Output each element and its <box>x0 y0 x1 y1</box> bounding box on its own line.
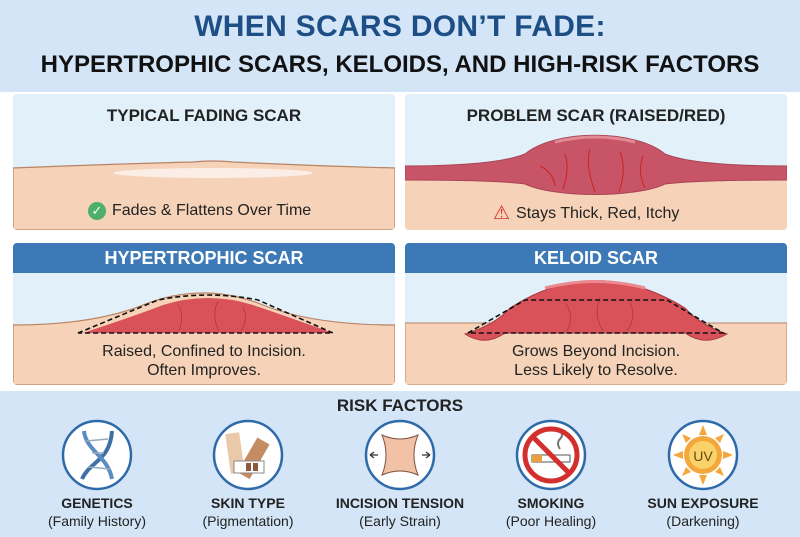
heading: RISK FACTORS <box>337 396 463 415</box>
label: incision tension: INCISION TENSION <box>336 495 464 511</box>
caption with warning icon: Stays Thick, Red, Itchy <box>516 204 679 222</box>
caption: Often Improves. <box>147 362 261 379</box>
caption: Less Likely to Resolve. <box>514 362 678 379</box>
icon: tension <box>370 435 430 475</box>
panel: problem scar <box>405 94 787 230</box>
panel: hypertrophic scar <box>13 243 395 385</box>
label: skin type: SKIN TYPE <box>211 495 285 511</box>
icon: dna <box>82 431 112 479</box>
label: genetics: (Family History) <box>48 513 146 529</box>
header bar: KELOID SCAR <box>534 248 658 268</box>
caption <box>102 343 306 379</box>
icon: sun uv <box>673 425 733 485</box>
label: smoking <box>506 495 596 529</box>
caption <box>512 343 680 379</box>
subtitle: HYPERTROPHIC SCARS, KELOIDS, AND HIGH-RISK FACTORS <box>41 51 759 78</box>
label: sun exposure <box>647 495 759 529</box>
label: sun exposure: SUN EXPOSURE <box>647 495 759 511</box>
label: skin type <box>202 495 294 529</box>
label: incision tension <box>336 495 464 529</box>
icon: no smoking <box>525 429 577 481</box>
panel: risk factors <box>0 391 800 537</box>
caption with check icon: ✓ <box>92 203 102 218</box>
label: incision tension: (Early Strain) <box>359 513 441 529</box>
caption: Grows Beyond Incision. <box>512 343 680 360</box>
icon: sun uv: UV <box>693 448 713 464</box>
label: genetics: GENETICS <box>61 495 133 511</box>
caption: Raised, Confined to Incision. <box>102 343 306 360</box>
icon: skin swatches <box>225 432 270 479</box>
label: skin type: (Pigmentation) <box>202 513 294 529</box>
panel: keloid scar <box>405 243 787 385</box>
label: sun exposure: (Darkening) <box>666 513 740 529</box>
header bar: HYPERTROPHIC SCAR <box>104 248 304 268</box>
title: WHEN SCARS DON’T FADE: <box>194 10 606 43</box>
header band <box>0 0 800 92</box>
panel: typical fading scar <box>13 94 395 230</box>
header bar <box>13 243 395 273</box>
heading: PROBLEM SCAR (RAISED/RED) <box>467 106 725 125</box>
caption with warning icon: ⚠ <box>493 203 510 224</box>
label: smoking: SMOKING <box>518 495 584 511</box>
heading: TYPICAL FADING SCAR <box>107 106 301 125</box>
label: smoking: (Poor Healing) <box>506 513 596 529</box>
label: genetics <box>48 495 146 529</box>
caption with check icon: Fades & Flattens Over Time <box>112 202 311 219</box>
header bar <box>405 243 787 273</box>
